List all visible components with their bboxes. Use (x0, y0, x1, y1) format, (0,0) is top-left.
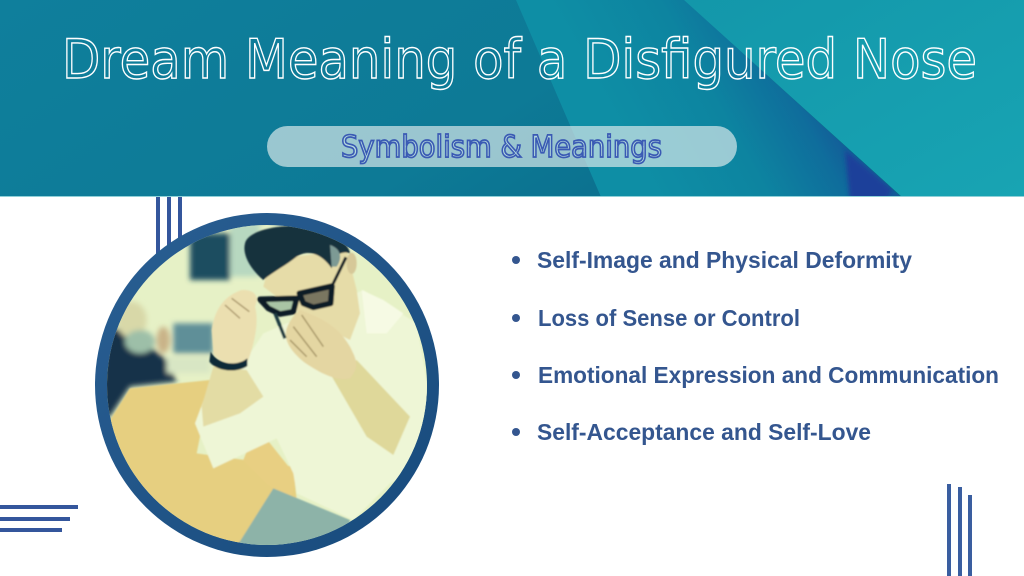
forearm left (202, 367, 263, 427)
hand on nose (286, 310, 356, 379)
subtitle: Symbolism & Meanings (341, 130, 662, 165)
item 2: Loss of Sense or Control (538, 305, 800, 331)
forearm right (330, 360, 410, 455)
trousers (237, 488, 350, 550)
raised hand left (212, 290, 257, 363)
decorative lines left (0, 505, 78, 532)
hair (244, 226, 350, 280)
subtitle pill (267, 126, 737, 167)
wristband (209, 352, 247, 371)
shirt (195, 290, 430, 520)
bullet list (512, 247, 999, 445)
ear (347, 253, 357, 274)
background blur (100, 223, 260, 417)
item 4: Self-Acceptance and Self-Love (537, 419, 871, 445)
neck and face (263, 250, 360, 340)
decorative lines right (947, 484, 972, 576)
item 1: Self-Image and Physical Deformity (537, 247, 912, 273)
item 3: Emotional Expression and Communication (538, 362, 999, 388)
decorative lines top (156, 197, 182, 257)
header banner (0, 0, 1024, 200)
table (110, 380, 297, 542)
photo: man adjusting glasses (107, 225, 427, 545)
circular photo frame (95, 213, 439, 557)
glasses (260, 257, 346, 338)
